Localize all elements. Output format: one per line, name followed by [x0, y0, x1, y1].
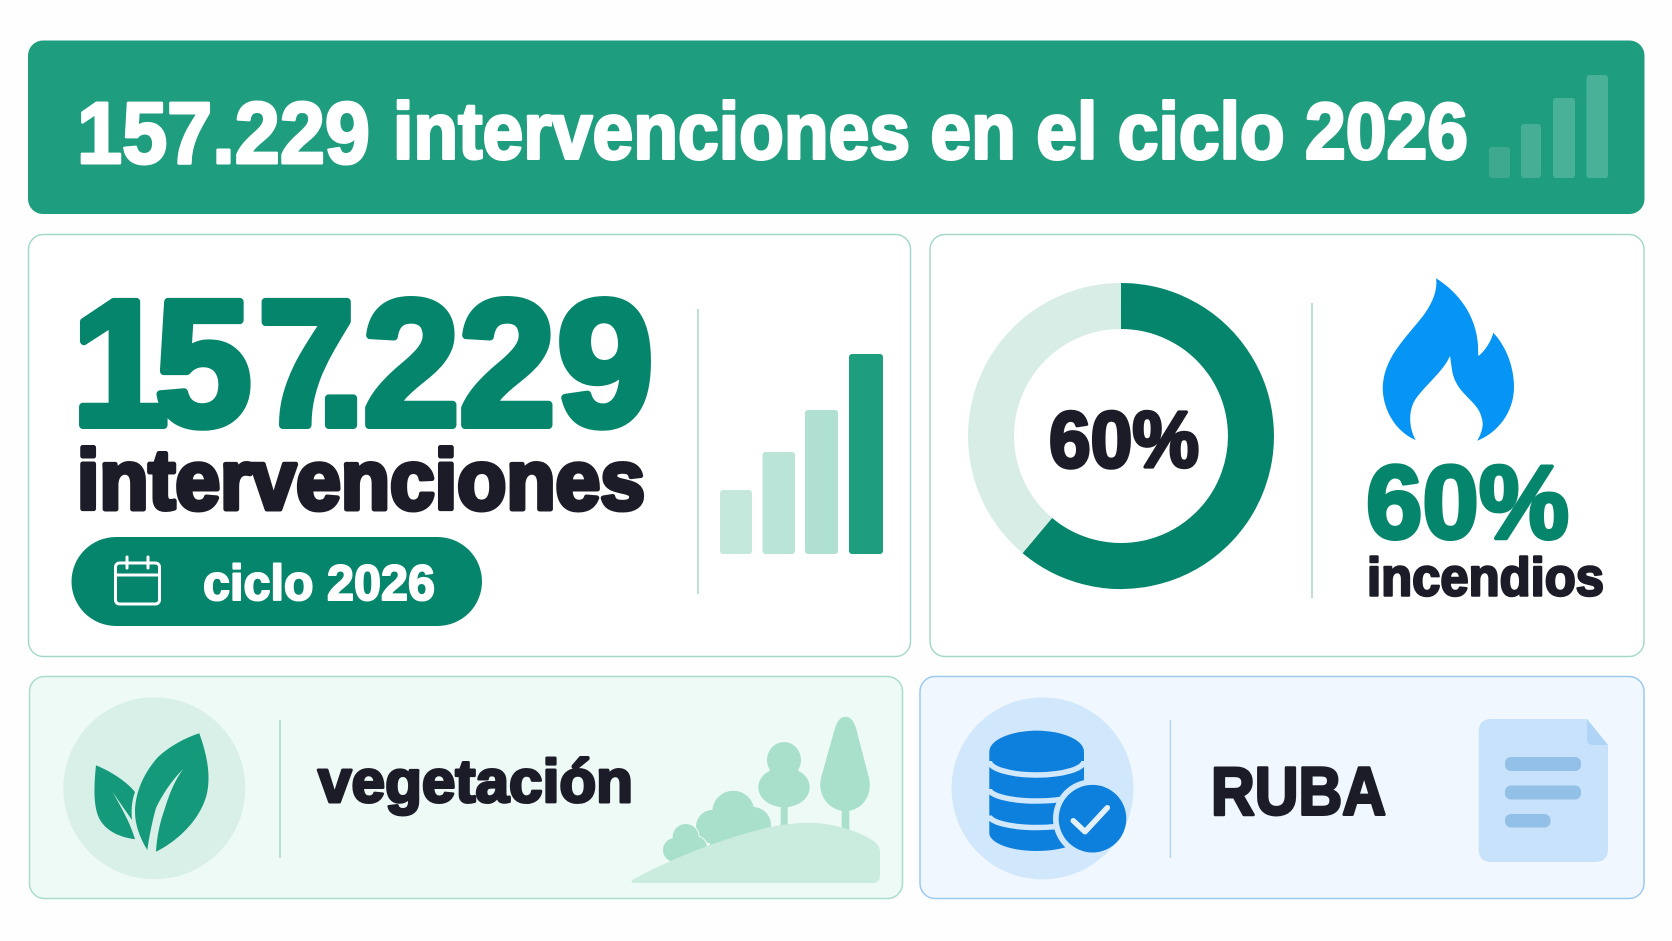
illustration: landscape: [632, 717, 880, 883]
title: 157.229: [77, 85, 370, 182]
panel: interventions: [28, 234, 910, 656]
title: [77, 85, 1468, 182]
icon: flame: [1383, 278, 1514, 441]
icon: document: [1479, 719, 1608, 862]
icon: check badge: [1059, 785, 1126, 852]
panel: RUBA: [920, 676, 1644, 898]
header banner: [28, 40, 1644, 214]
donut chart: 60%: [1049, 395, 1199, 484]
stat: 60%: 60%: [1366, 445, 1569, 561]
label: vegetación: vegetación: [318, 748, 633, 815]
title: intervenciones en el ciclo 2026: [393, 86, 1468, 176]
big number: 157.229: [72, 264, 654, 464]
pill: ciclo 2026: [72, 537, 482, 626]
label: RUBA: RUBA: [1211, 754, 1386, 830]
donut chart: [991, 306, 1251, 566]
pill: ciclo 2026: ciclo 2026: [203, 555, 435, 611]
label: incendios: incendios: [1367, 548, 1604, 608]
panel: incendios: [930, 234, 1644, 656]
header bar icon: [1489, 75, 1608, 178]
icon: database: [952, 697, 1134, 879]
icon: calendar: [116, 557, 160, 604]
bar chart: [720, 354, 883, 554]
label: intervenciones: intervenciones: [77, 433, 645, 527]
icon: leaves: [63, 697, 245, 879]
panel: vegetación: [30, 676, 902, 898]
